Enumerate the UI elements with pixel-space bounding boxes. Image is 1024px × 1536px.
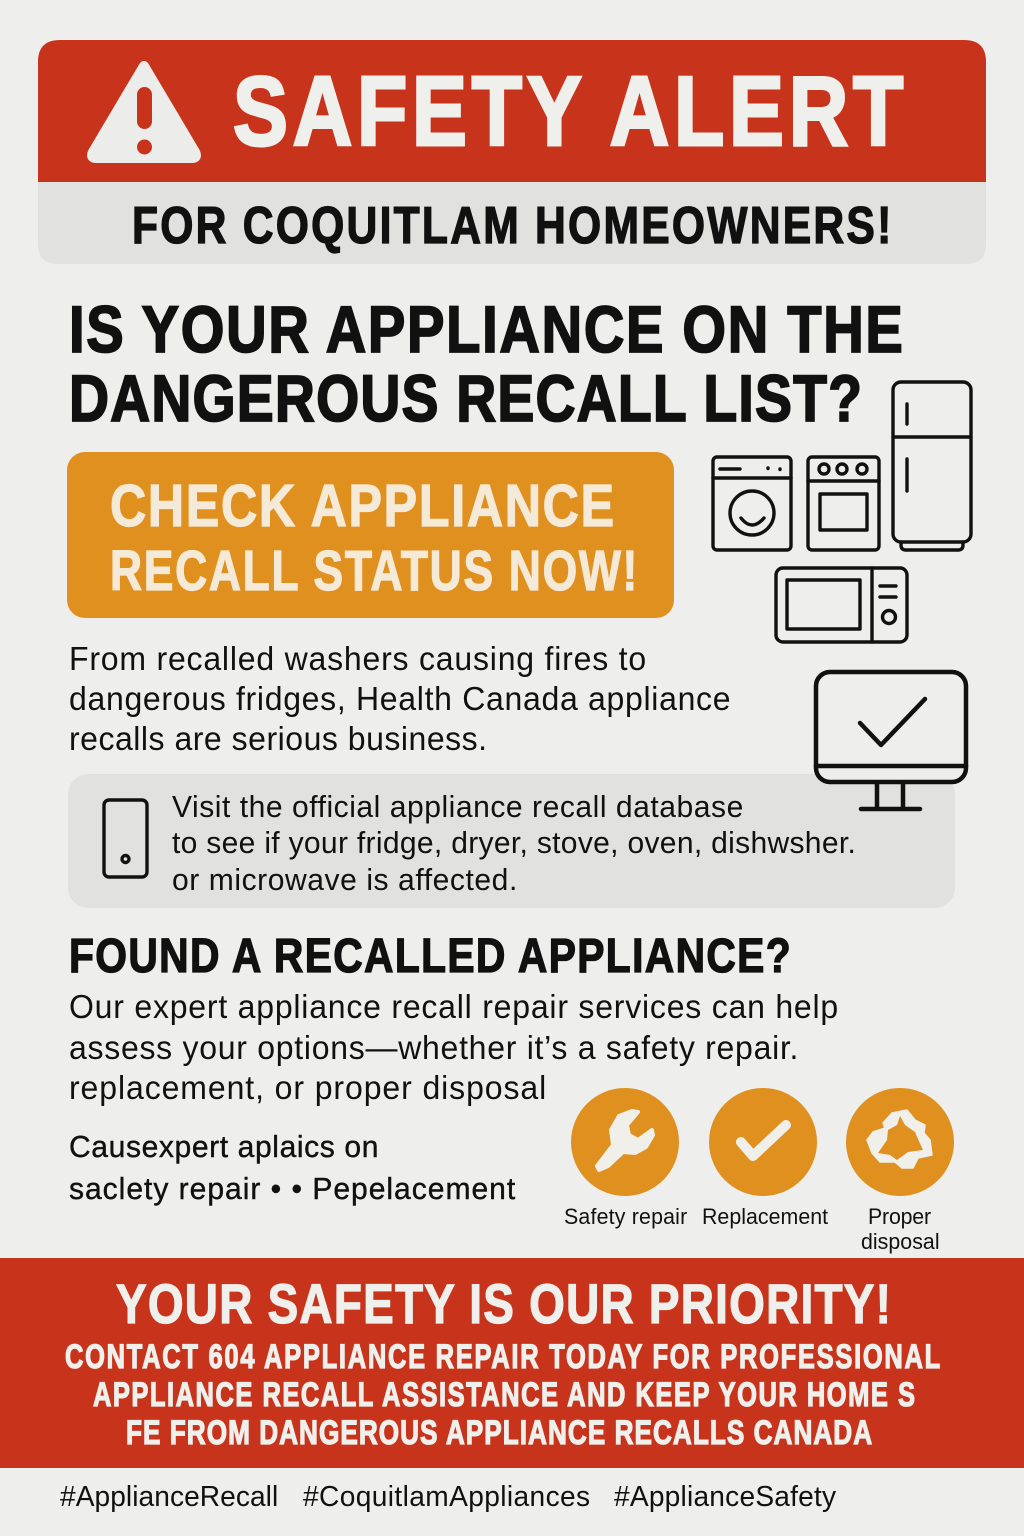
main heading (69, 293, 903, 435)
call to action button: RECALL STATUS NOW! (110, 539, 637, 602)
footer banner: APPLIANCE RECALL ASSISTANCE AND KEEP YOUR HOME S (93, 1377, 915, 1414)
small service text: saclety repair • • Pepelacement (69, 1172, 516, 1206)
service: proper disposal: disposal (861, 1229, 940, 1254)
section text (69, 989, 838, 1106)
call to action button (67, 452, 674, 618)
main heading: DANGEROUS RECALL LIST? (69, 361, 862, 435)
icon: oven (808, 457, 879, 550)
body paragraph: From recalled washers causing fires to (69, 641, 646, 677)
service: replacement: Replacement (702, 1204, 828, 1229)
hashtags: #ApplianceSafety (614, 1481, 837, 1513)
panel text: to see if your fridge, dryer, stove, oven, dishwsher. (172, 826, 856, 860)
body paragraph: recalls are serious business. (69, 721, 487, 757)
panel text: Visit the official appliance recall database (172, 790, 743, 824)
section text: Our expert appliance recall repair services can help (69, 989, 838, 1025)
service: safety repair (564, 1088, 687, 1229)
service: replacement (702, 1088, 828, 1229)
icon: monitor with check mark (816, 672, 966, 809)
icon: wrench (597, 1111, 653, 1170)
panel: recall database (68, 774, 955, 908)
body paragraph (69, 641, 731, 757)
icon: recycle blob (867, 1110, 932, 1168)
header banner (38, 40, 986, 264)
icon: phone (104, 800, 147, 877)
small service text (69, 1130, 516, 1206)
icon: microwave (776, 568, 907, 642)
section text: assess your options—whether it’s a safety repair. (69, 1030, 798, 1066)
body paragraph: dangerous fridges, Health Canada appliance (69, 681, 731, 717)
footer banner: FE FROM DANGEROUS APPLIANCE RECALLS CANADA (126, 1415, 872, 1452)
panel text (172, 790, 856, 897)
hashtags: #ApplianceRecall (60, 1481, 278, 1513)
hashtags (60, 1481, 837, 1513)
subtitle: for coquitlam homeowners: FOR COQUITLAM HOMEOWNERS! (132, 197, 891, 255)
service: proper disposal (846, 1088, 954, 1254)
section heading: found a recalled appliance: FOUND A RECALLED APPLIANCE? (69, 930, 791, 983)
small service text: Causexpert aplaics on (69, 1130, 378, 1164)
call to action button: CHECK APPLIANCE (110, 472, 614, 539)
main heading: IS YOUR APPLIANCE ON THE (69, 293, 903, 366)
section text: replacement, or proper disposal (69, 1070, 546, 1106)
icon: check mark (741, 1125, 786, 1156)
icon: warning triangle (92, 66, 196, 158)
footer banner (0, 1258, 1024, 1468)
footer banner: YOUR SAFETY IS OUR PRIORITY! (116, 1273, 891, 1335)
service: proper disposal: Proper (868, 1204, 931, 1229)
footer banner: CONTACT 604 APPLIANCE REPAIR TODAY FOR PROFESSIONAL (65, 1339, 940, 1376)
hashtags: #CoquitlamAppliances (303, 1481, 590, 1513)
icon: washing machine (713, 457, 791, 550)
service: safety repair: Safety repair (564, 1204, 687, 1229)
icon: refrigerator (893, 382, 971, 550)
title: safety alert: SAFETY ALERT (233, 57, 903, 167)
panel text: or microwave is affected. (172, 863, 517, 897)
icon group: appliances (713, 382, 971, 642)
